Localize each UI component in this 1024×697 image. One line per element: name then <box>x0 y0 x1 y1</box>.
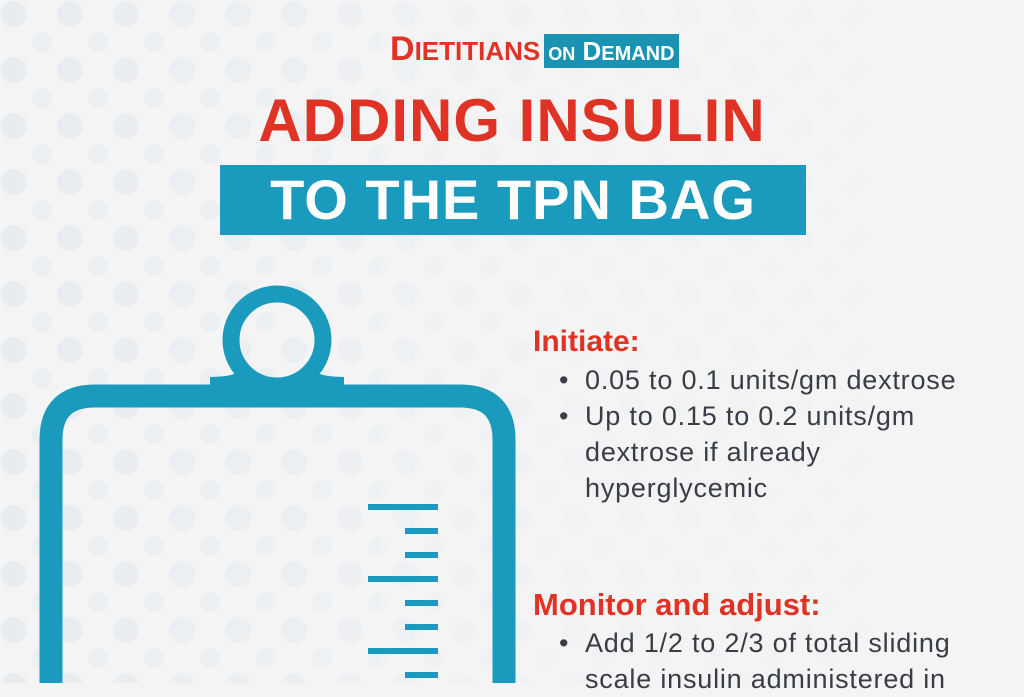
section: monitor: Monitor and adjust: <box>533 587 821 622</box>
title: ADDING INSULIN <box>258 87 766 154</box>
background dots <box>1 1 251 683</box>
section: initiate: Initiate: <box>533 325 640 358</box>
logo: DIETITIANS ON DEMAND <box>390 30 675 68</box>
icon: TPN bag <box>40 286 516 683</box>
section: monitor: Add 1/2 to 2/3 of total sliding <box>585 628 951 658</box>
section: monitor: scale insulin administered in <box>585 664 946 694</box>
section: monitor: • <box>559 628 569 658</box>
section: initiate: • <box>559 401 569 431</box>
section: monitor <box>533 587 951 694</box>
section: initiate: 0.05 to 0.1 units/gm dextrose <box>585 365 956 395</box>
subtitle banner: TO THE TPN BAG <box>270 168 756 231</box>
section: initiate: dextrose if already <box>585 437 821 467</box>
section: initiate: hyperglycemic <box>585 473 768 503</box>
section: initiate: • <box>559 365 569 395</box>
section: initiate <box>533 325 956 503</box>
section: initiate: Up to 0.15 to 0.2 units/gm <box>585 401 915 431</box>
